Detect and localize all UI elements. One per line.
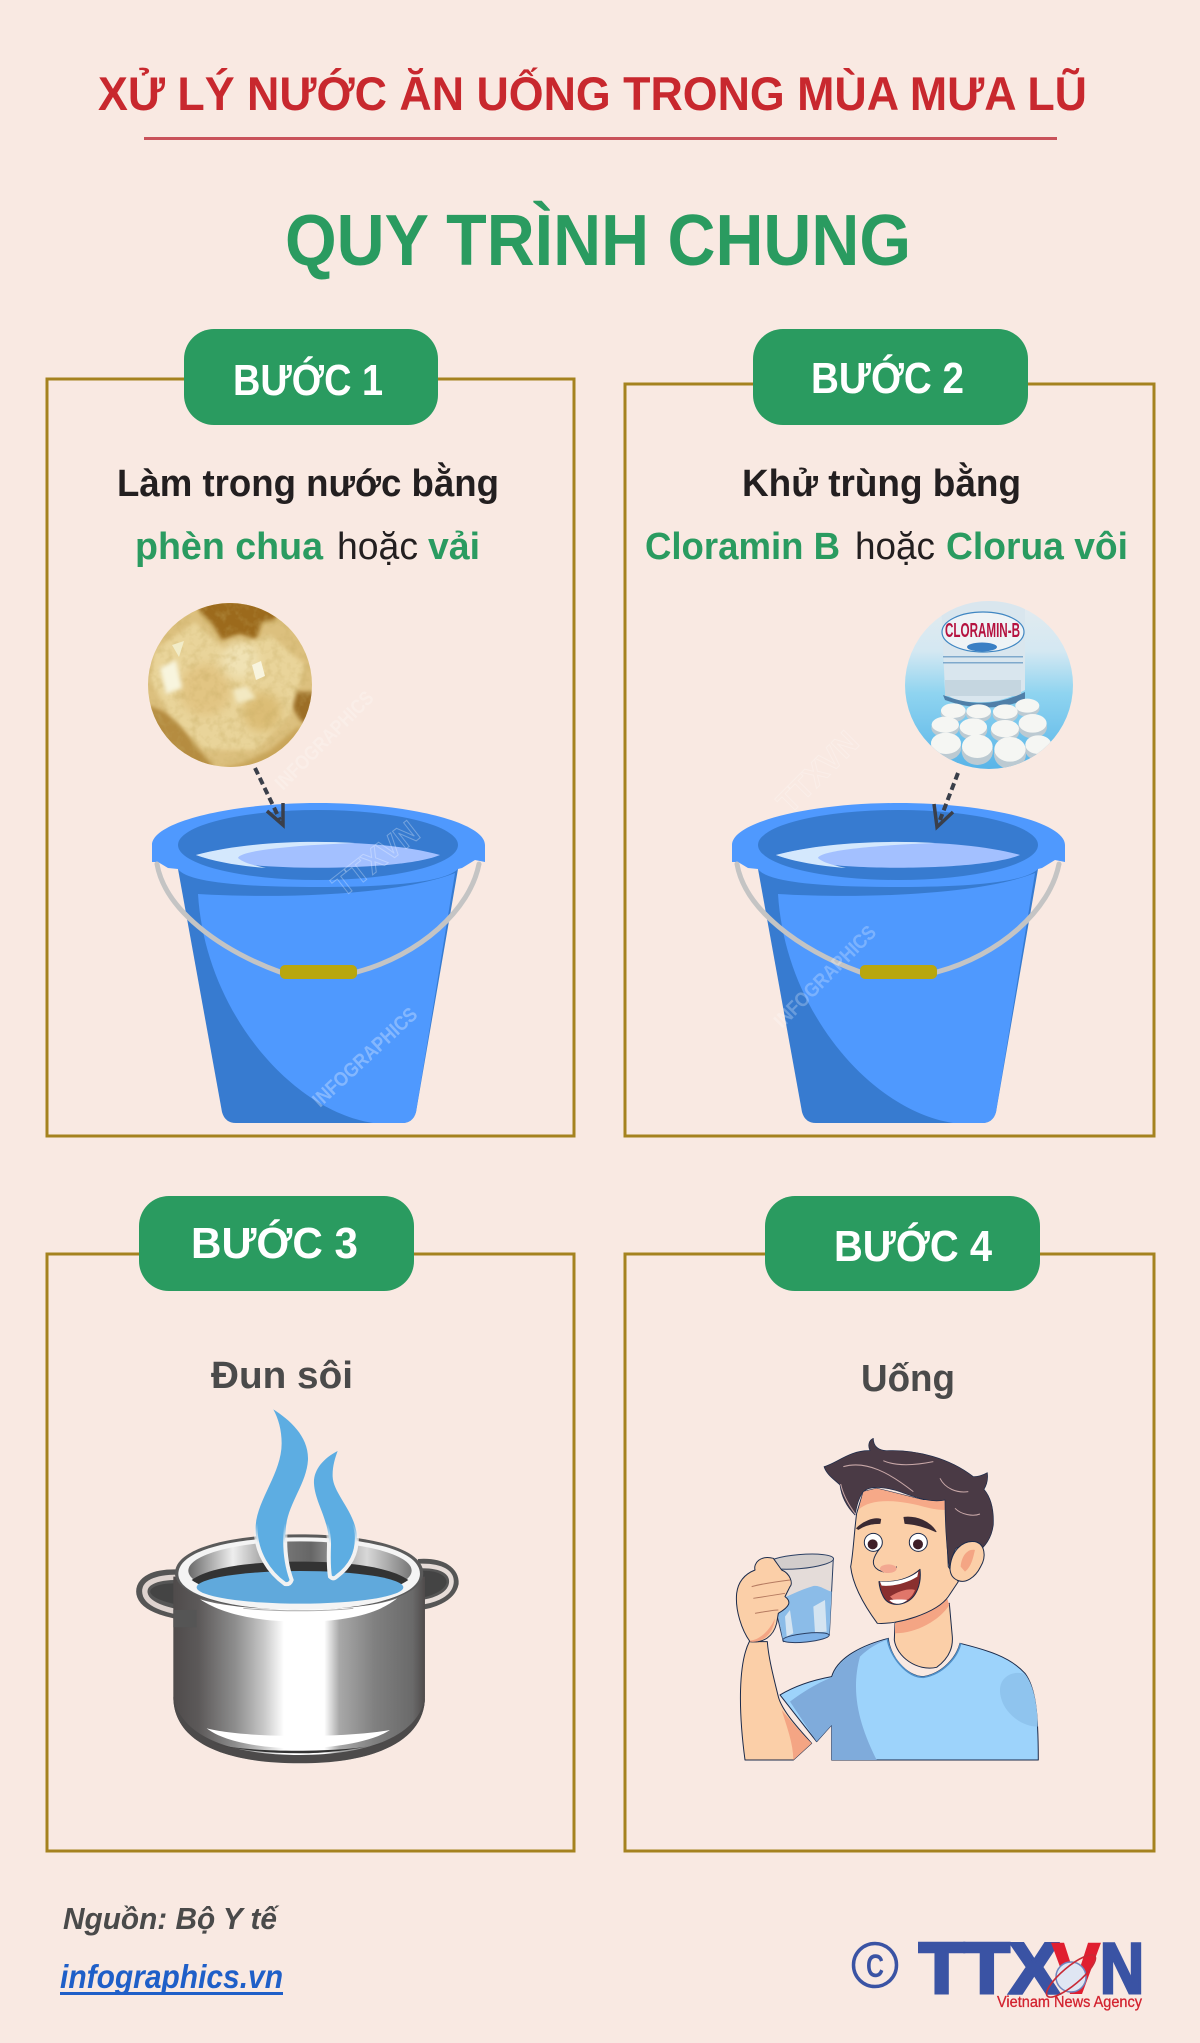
panel: step 2 [625,329,1154,1136]
watermarks: TTXVN [325,814,426,904]
arrow: alum into bucket [255,768,283,825]
watermarks [271,687,881,1112]
watermarks: INFOGRAPHICS [308,1003,422,1112]
step 2 badge [753,329,1028,425]
logo: TTXVN: V [1052,1930,1100,2009]
step 1 description: vải [428,526,480,568]
panel: step 3 [47,1196,574,1851]
watermarks: TTXVN [769,724,866,820]
logo: TTXVN: Vietnam News Agency [997,1994,1142,2011]
step 3 badge [139,1196,414,1291]
step 2 description: Khử trùng bằng [742,461,1021,505]
watermarks: INFOGRAPHICS [770,922,881,1033]
panel: step 1 [47,329,574,1136]
step 1 description: phèn chua [135,526,324,568]
step 4 description: Uống [861,1358,955,1400]
step 4 badge [765,1196,1040,1291]
step 4 badge: BƯỚC 4 [834,1221,992,1271]
copyright mark [854,1944,896,1986]
step 1 description: Làm trong nước bằng [117,461,499,505]
icon: boiling pot [143,1409,453,1763]
step 1 badge [184,329,438,425]
panel: step 4 [625,1196,1154,1851]
step 1 description [117,461,499,568]
step 2 badge: BƯỚC 2 [811,353,964,403]
step 2 description: Cloramin B [645,526,840,568]
icon: man drinking water [736,1438,1038,1760]
logo: TTXVN: TTX [919,1930,1059,2009]
step 3 description: Đun sôi [211,1355,353,1397]
step 2 description: Clorua vôi [946,526,1128,568]
heading: quy trinh chung: QUY TRÌNH CHUNG [285,201,911,281]
photo: cloramin B bottle and tablets [900,600,1080,770]
logo: TTXVN: N [1100,1930,1144,2009]
photo: alum crystals [145,600,315,770]
step 3 badge: BƯỚC 3 [191,1218,358,1268]
step 1 description: hoặc [337,526,418,568]
icon: bucket 2 [732,803,1065,1123]
copyright mark: C [866,1948,884,1984]
photo: cloramin B bottle and tablets: CLORAMIN-B [945,620,1020,642]
logo: TTXVN [854,1930,1144,2011]
title: XỬ LÝ NƯỚC ĂN UỐNG TRONG MÙA MƯA LŨ [98,67,1087,120]
step 2 description [645,461,1128,568]
step 2 description: hoặc [855,526,935,568]
website link: infographics.vn [60,1958,283,1995]
icon: bucket 1 [152,803,485,1123]
watermarks: INFOGRAPHICS [271,687,378,795]
arrow: cloramin into bucket [934,773,958,827]
step 1 badge: BƯỚC 1 [233,355,383,405]
source note: Nguồn: Bộ Y tế [63,1901,280,1936]
